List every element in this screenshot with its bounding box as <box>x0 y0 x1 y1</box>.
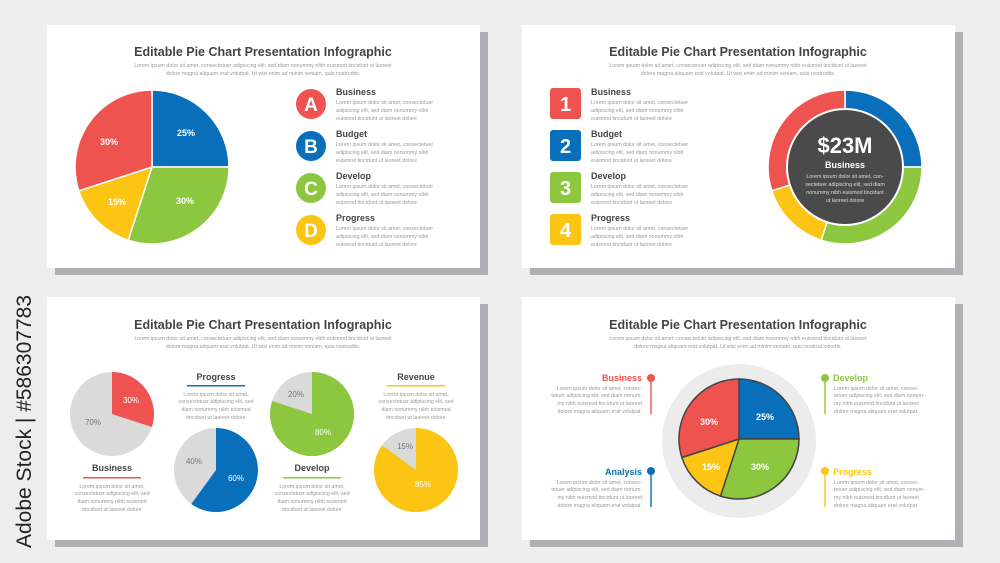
legend list: Progress <box>336 213 375 223</box>
pie: revenue 85%: 85% <box>415 480 431 489</box>
subtitle <box>609 336 867 350</box>
pie chart: 30% <box>100 137 118 147</box>
panel: top-right donut <box>522 25 963 275</box>
title: Editable Pie Chart Presentation Infographic <box>609 45 867 59</box>
legend list: A <box>304 95 318 116</box>
subtitle <box>609 63 867 77</box>
subtitle: Lorem ipsum dolor sit amet, consectetuer adipiscing elit, sed diam nonummy nibh euismod tincidunt ut laoreet <box>609 63 867 69</box>
legend list: adipiscing elit, sed diam nonummy nibh <box>336 108 429 114</box>
labels: Lorem ipsum dolor sit amet, <box>279 484 345 490</box>
pie: progress 60%: 60% <box>228 474 244 483</box>
callouts: dolore magna aliquam erat volutpat. <box>557 503 642 509</box>
legend list: Lorem ipsum dolor sit amet, consectetuer <box>336 184 433 190</box>
pie chart: 25% <box>756 412 774 422</box>
numbered list: Lorem ipsum dolor sit amet, consectetuer <box>591 100 688 106</box>
numbered list <box>550 87 688 248</box>
panel: bottom-right pie with pins <box>522 297 963 547</box>
donut chart: Business <box>825 160 865 170</box>
numbered list: euismod tincidunt ut laoreet dolore <box>591 200 672 206</box>
numbered list: Lorem ipsum dolor sit amet, consectetuer <box>591 226 688 232</box>
labels: diam nonummy nibh euismod <box>181 407 251 413</box>
labels: Lorem ipsum dolor sit amet, <box>183 392 249 398</box>
labels: tincidunt ut laoreet dolore <box>186 415 246 421</box>
donut chart: Lorem ipsum dolor sit amet, con- <box>806 174 884 180</box>
callouts: Develop <box>833 373 869 383</box>
donut chart: nonummy nibh euismod tincidunt <box>806 190 884 196</box>
numbered list: euismod tincidunt ut laoreet dolore <box>591 242 672 248</box>
subtitle: dolore magna aliquam erat volutpat. Ut wisi enim ad minim veniam, quis nostrud lobortis. <box>634 344 842 350</box>
labels: Business <box>92 463 132 473</box>
legend list: Budget <box>336 129 367 139</box>
callouts: tetuer adipiscing elit, sed diam nonum- <box>834 487 925 493</box>
labels: Revenue <box>397 372 435 382</box>
donut chart: $23M <box>817 133 873 158</box>
callouts: tetuer adipiscing elit, sed diam nonum- <box>834 393 925 399</box>
subtitle <box>134 336 392 350</box>
callouts: my nibh euismod tincidunt ut laoreet <box>834 401 919 407</box>
numbered list: euismod tincidunt ut laoreet dolore <box>591 116 672 122</box>
pie chart: 30% <box>176 196 194 206</box>
labels: consectetuer adipiscing elit, sed <box>178 399 254 405</box>
numbered list: Lorem ipsum dolor sit amet, consectetuer <box>591 184 688 190</box>
pie chart <box>662 364 816 518</box>
numbered list: Lorem ipsum dolor sit amet, consectetuer <box>591 142 688 148</box>
numbered list: Business <box>591 87 631 97</box>
pie chart: 25% <box>177 128 195 138</box>
pie chart: 30% <box>700 417 718 427</box>
legend list: D <box>304 221 318 242</box>
callouts: tetuer adipiscing elit, sed diam nonum- <box>551 487 642 493</box>
pie chart <box>75 90 229 244</box>
pie: business 30% <box>70 372 154 456</box>
legend list: C <box>304 179 318 200</box>
labels: Lorem ipsum dolor sit amet, <box>383 392 449 398</box>
labels: Lorem ipsum dolor sit amet, <box>79 484 145 490</box>
pie: revenue 85% <box>374 428 458 512</box>
numbered list: Progress <box>591 213 630 223</box>
labels: tincidunt ut laoreet dolore <box>82 507 142 513</box>
labels: diam nonummy nibh euismod <box>277 499 347 505</box>
numbered list: adipiscing elit, sed diam nonummy nibh <box>591 108 684 114</box>
numbered list: Develop <box>591 171 627 181</box>
numbered list: 4 <box>560 220 572 242</box>
callouts: my nibh euismod tincidunt ut laoreet <box>834 495 919 501</box>
legend list: euismod tincidunt ut laoreet dolore <box>336 200 417 206</box>
numbered list: adipiscing elit, sed diam nonummy nibh <box>591 150 684 156</box>
pie chart: 30% <box>751 462 769 472</box>
subtitle <box>134 63 392 77</box>
legend list: B <box>304 137 318 158</box>
numbered list: 1 <box>560 94 571 116</box>
numbered list: 2 <box>560 136 571 158</box>
subtitle: Lorem ipsum dolor sit amet, consectetuer adipiscing elit, sed diam nonummy nibh euismod tincidunt ut laoreet <box>134 336 392 342</box>
callouts <box>551 373 925 509</box>
pie: develop 80%: 20% <box>288 390 304 399</box>
callouts: dolore magna aliquam erat volutpat. <box>557 409 642 415</box>
pie: progress 60%: 40% <box>186 457 202 466</box>
pie: business 30%: 30% <box>123 396 139 405</box>
legend list: adipiscing elit, sed diam nonummy nibh <box>336 234 429 240</box>
donut chart <box>768 90 922 244</box>
callouts: dolore magna aliquam erat volutpat. <box>834 409 919 415</box>
watermark id text: Adobe Stock | #586307783 <box>13 295 36 548</box>
numbered list: 3 <box>560 178 571 200</box>
pie: business 30%: 70% <box>85 418 101 427</box>
callouts: Business <box>602 373 642 383</box>
panel: top-left pie with letters <box>47 25 488 275</box>
numbered list: Budget <box>591 129 622 139</box>
numbered list: adipiscing elit, sed diam nonummy nibh <box>591 192 684 198</box>
legend list: adipiscing elit, sed diam nonummy nibh <box>336 192 429 198</box>
labels: Progress <box>196 372 236 382</box>
legend list <box>296 87 433 248</box>
callouts: Lorem ipsum dolor sit amet, consec- <box>834 386 920 392</box>
labels: Develop <box>294 463 330 473</box>
pie: develop 80% <box>270 372 354 456</box>
legend list: Develop <box>336 171 372 181</box>
subtitle: Lorem ipsum dolor sit amet, consectetuer adipiscing elit, sed diam nonummy nibh euismod tincidunt ut laoreet <box>134 63 392 69</box>
subtitle: dolore magna aliquam erat volutpat. Ut wisi enim ad minim veniam, quis nostrudtis. <box>166 344 360 350</box>
callouts: dolore magna aliquam erat volutpat. <box>834 503 919 509</box>
callouts: Analysis <box>605 467 642 477</box>
legend list: euismod tincidunt ut laoreet dolore <box>336 158 417 164</box>
legend list: Lorem ipsum dolor sit amet, consectetuer <box>336 100 433 106</box>
callouts: tetuer adipiscing elit, sed diam nonum- <box>551 393 642 399</box>
numbered list: adipiscing elit, sed diam nonummy nibh <box>591 234 684 240</box>
pie: revenue 85%: 15% <box>397 442 413 451</box>
callouts: my nibh euismod tincidunt ut laoreet <box>557 495 643 501</box>
callouts: Lorem ipsum dolor sit amet, consec- <box>557 480 642 486</box>
legend list: Lorem ipsum dolor sit amet, consectetuer <box>336 142 433 148</box>
labels: consectetuer adipiscing elit, sed <box>74 491 150 497</box>
callouts: my nibh euismod tincidunt ut laoreet <box>557 401 643 407</box>
panel: bottom-left four pies <box>47 297 488 547</box>
legend list: adipiscing elit, sed diam nonummy nibh <box>336 150 429 156</box>
pie: progress 60% <box>174 428 258 512</box>
labels: tincidunt ut laoreet dolore <box>282 507 342 513</box>
subtitle: dolore magna aliquam erat volutpat. Ut wisi enim ad minim veniam, quis nostrudtis. <box>641 71 835 77</box>
callouts: Progress <box>833 467 872 477</box>
legend list: Lorem ipsum dolor sit amet, consectetuer <box>336 226 433 232</box>
title: Editable Pie Chart Presentation Infographic <box>609 318 867 332</box>
numbered list: euismod tincidunt ut laoreet dolore <box>591 158 672 164</box>
labels: consectetuer adipiscing elit, sed <box>274 491 350 497</box>
callouts: Lorem ipsum dolor sit amet, consec- <box>557 386 642 392</box>
labels: tincidunt ut laoreet dolore <box>386 415 446 421</box>
labels <box>74 372 454 513</box>
legend list: euismod tincidunt ut laoreet dolore <box>336 116 417 122</box>
pie chart: 15% <box>702 462 720 472</box>
labels: diam nonummy nibh euismod <box>381 407 451 413</box>
subtitle: Lorem ipsum dolor sit amet, consectetuer adipiscing elit, sed diam nonummy nibh euismod tincidunt ut laoreet <box>609 336 867 342</box>
donut chart: sectetuer adipiscing elit, sed diam <box>805 182 885 188</box>
legend list: euismod tincidunt ut laoreet dolore <box>336 242 417 248</box>
title: Editable Pie Chart Presentation Infographic <box>134 318 392 332</box>
donut chart: ut laoreet dolore <box>826 198 864 204</box>
title: Editable Pie Chart Presentation Infographic <box>134 45 392 59</box>
callouts: Lorem ipsum dolor sit amet, consec- <box>834 480 920 486</box>
subtitle: dolore magna aliquam erat volutpat. Ut wisi enim ad minim veniam, quis nostrudtis. <box>166 71 360 77</box>
pie chart: 15% <box>108 197 126 207</box>
labels: diam nonummy nibh euismod <box>77 499 147 505</box>
labels: consectetuer adipiscing elit, sed <box>378 399 454 405</box>
legend list: Business <box>336 87 376 97</box>
pie: develop 80%: 80% <box>315 428 331 437</box>
